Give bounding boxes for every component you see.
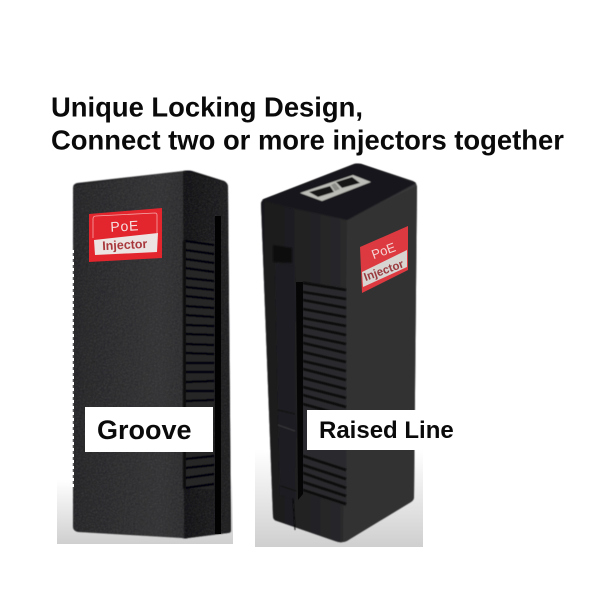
side ribs right — [303, 282, 346, 506]
PoE Injector sticker left: Injector — [102, 237, 148, 253]
right photo: injector with raised line — [255, 164, 467, 547]
title — [51, 92, 564, 156]
PoE Injector sticker left: PoE — [110, 217, 140, 235]
floor shadow right — [255, 450, 423, 547]
top face with RJ45 ports — [262, 164, 416, 220]
PoE Injector sticker right — [360, 226, 408, 293]
floor shadow left — [57, 480, 233, 544]
side ribs left — [183, 241, 214, 489]
PoE Injector sticker left — [89, 208, 162, 262]
Raised Line label: Raised Line — [319, 417, 454, 444]
PoE Injector sticker right: Injector — [362, 258, 406, 284]
raised line latch — [273, 245, 296, 530]
title: Connect two or more injectors together — [51, 124, 564, 156]
PoE Injector sticker right: PoE — [369, 239, 398, 262]
left photo: injector with groove — [57, 170, 233, 544]
Groove label: Groove — [97, 415, 192, 445]
enclosure body left — [73, 170, 231, 539]
title: Unique Locking Design, — [51, 92, 363, 122]
groove slot — [215, 216, 221, 534]
ribbed slot shadow — [296, 282, 303, 500]
enclosure body right — [261, 164, 417, 542]
notched left edge — [71, 250, 74, 487]
Groove label — [85, 407, 213, 452]
Raised Line label — [307, 410, 467, 450]
